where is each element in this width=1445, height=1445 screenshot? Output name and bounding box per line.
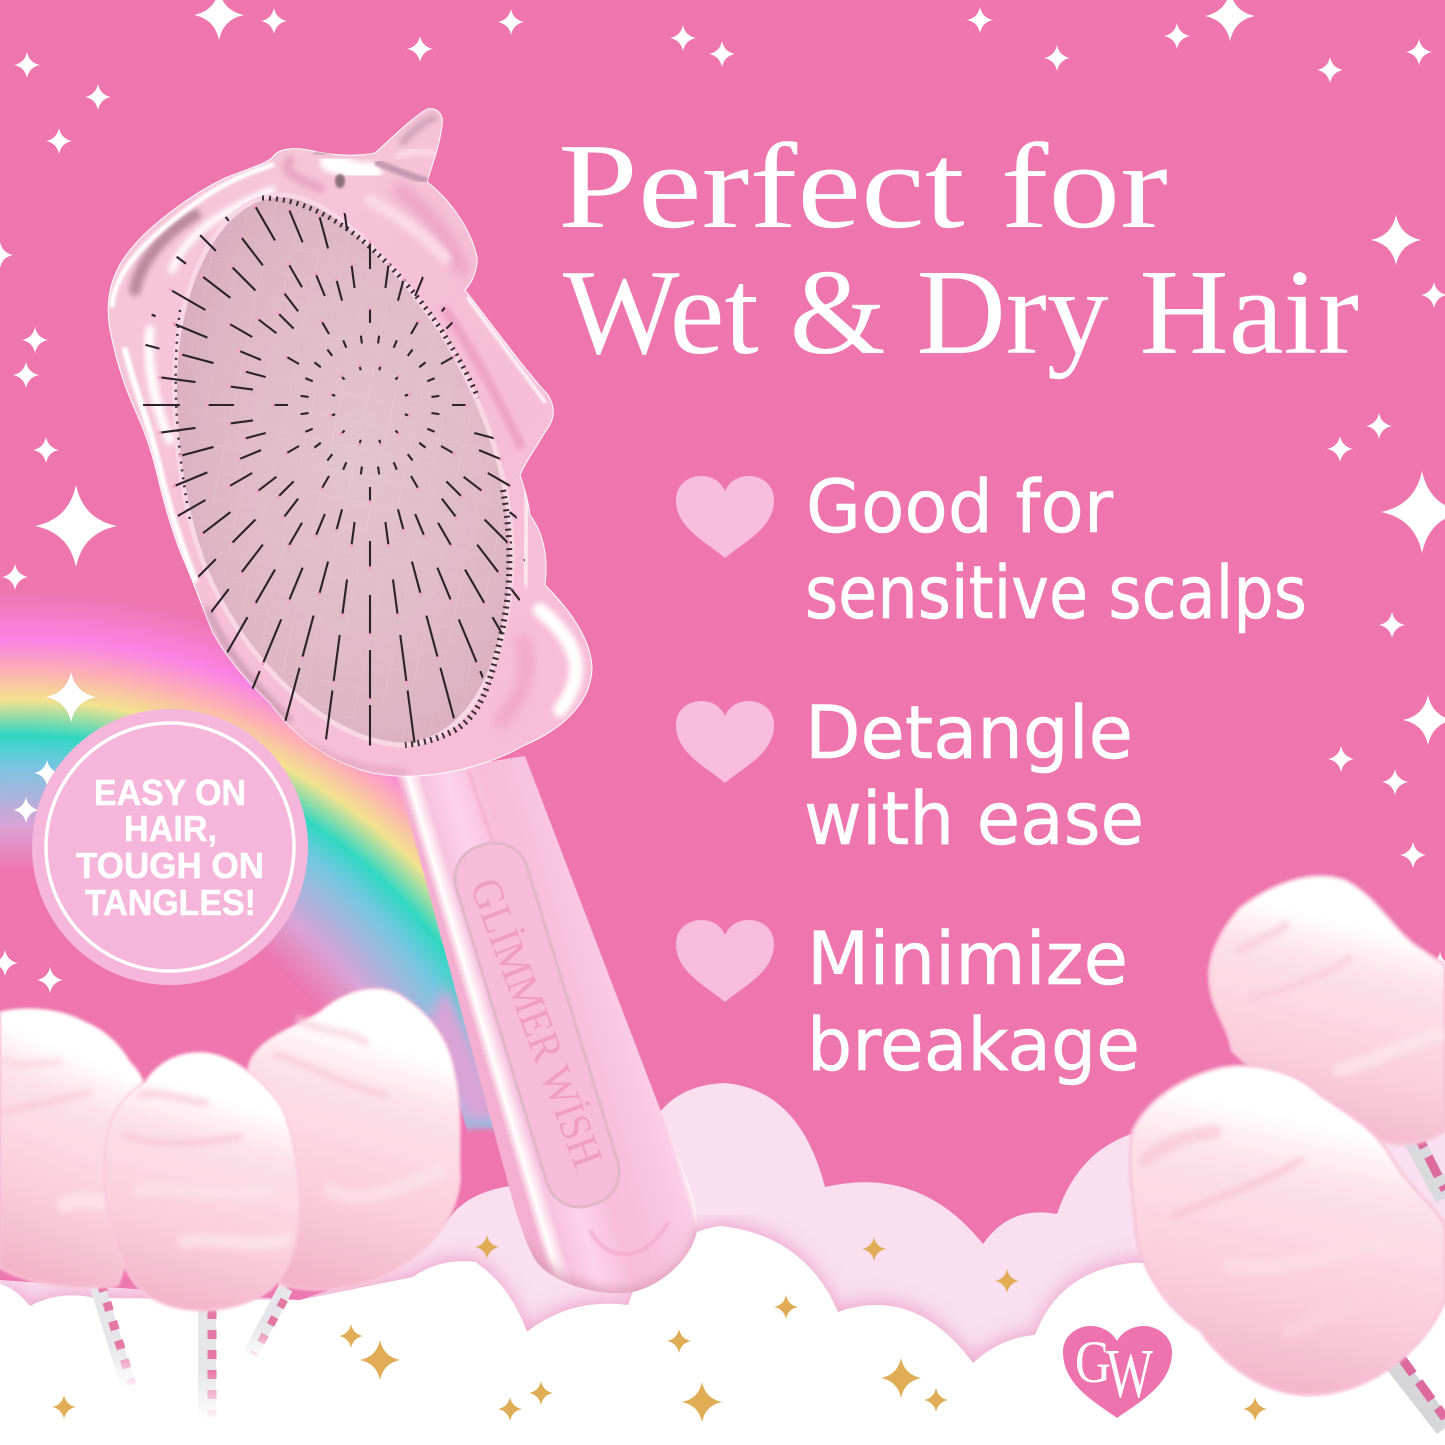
gold stars [64, 1247, 1255, 1409]
benefit: sensitive scalps: sensitive scalps [805, 551, 1307, 636]
handle logo plate [446, 834, 628, 1216]
brush head [108, 108, 592, 777]
brush handle [397, 756, 702, 1296]
white sparkle stars [0, 15, 1440, 980]
front white cloud [0, 1226, 1445, 1445]
plate rim teeth [176, 198, 509, 745]
cotton candy: center of group [104, 1053, 300, 1311]
head metal shading [112, 118, 576, 772]
benefit: minimize breakage: Minimize [807, 917, 1128, 1002]
benefit: minimize breakage [676, 917, 1140, 1088]
title: Perfect for [558, 119, 1168, 254]
title [558, 119, 1359, 380]
back cloud [0, 1083, 1445, 1445]
logo: GW heart: G [1075, 1329, 1111, 1395]
badge: easy on hair: TANGLES! [85, 882, 256, 923]
badge: easy on hair [32, 709, 308, 985]
benefit: detangle: with ease [804, 777, 1144, 862]
benefit: sensitive scalps: Good for [806, 465, 1114, 550]
badge: easy on hair: TOUGH ON [76, 845, 264, 886]
cotton candy: lower right [1130, 1066, 1445, 1395]
metal bristles [143, 204, 526, 746]
badge: easy on hair: HAIR, [124, 808, 217, 849]
logo: GW heart: W [1106, 1336, 1153, 1413]
benefit: sensitive scalps [676, 465, 1307, 636]
rainbow [0, 598, 494, 1140]
cotton candy: right of group [248, 989, 460, 1290]
badge: easy on hair: EASY ON [94, 772, 246, 813]
cotton candy: left [0, 1009, 145, 1288]
bristle plate [175, 195, 512, 745]
benefit: detangle [676, 691, 1144, 862]
cotton candy: upper right [1209, 876, 1445, 1144]
benefit: detangle: Detangle [805, 691, 1133, 776]
logo: GW heart [1063, 1326, 1172, 1418]
title: Wet & Dry Hair [563, 245, 1359, 380]
benefit: minimize breakage: breakage [807, 1003, 1140, 1088]
brand text on handle: GLİMMER WİSH [460, 872, 613, 1174]
cotton candy sticks [97, 1128, 1445, 1428]
